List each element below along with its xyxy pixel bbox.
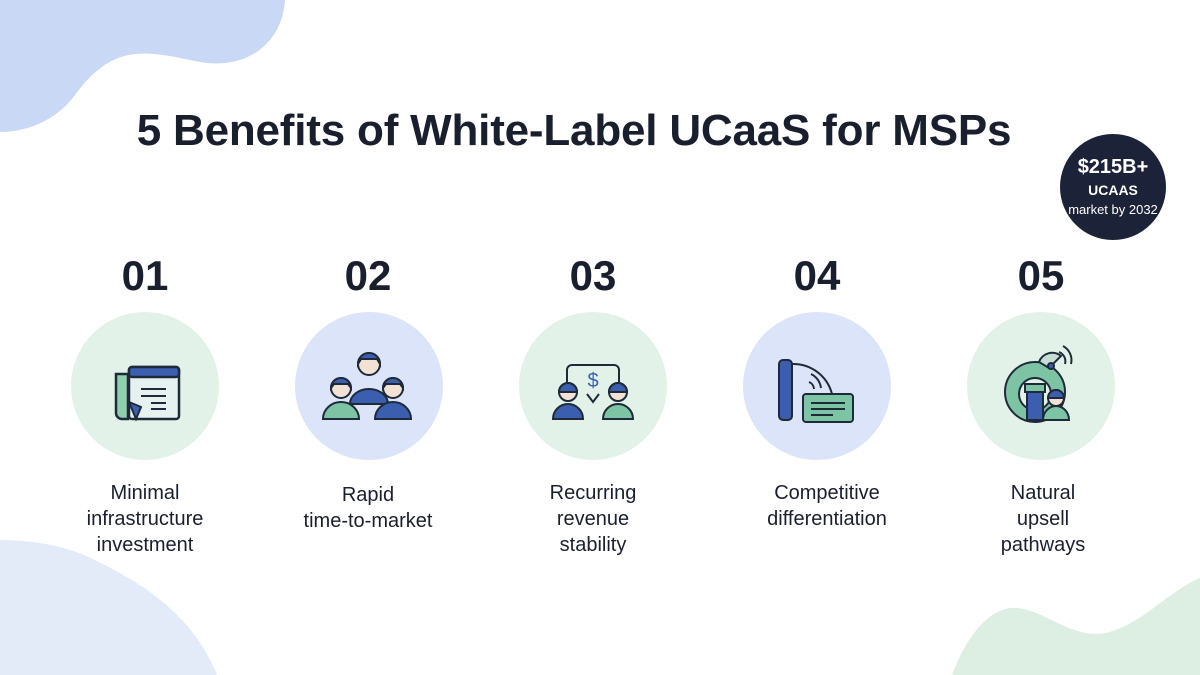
- label 3: stability: [560, 534, 626, 556]
- label 2: time-to-market: [304, 510, 432, 532]
- icon circle 1: document: [71, 312, 219, 460]
- label 4: differentiation: [767, 508, 887, 530]
- icon circle 5: upsell: [967, 312, 1115, 460]
- label 1: infrastructure: [87, 508, 203, 530]
- label 5: upsell: [1017, 508, 1069, 530]
- label 5: [1001, 482, 1085, 556]
- label 1: [87, 482, 203, 556]
- label 2: [304, 484, 432, 532]
- icon circle 2: team: [295, 312, 443, 460]
- badge: market stat: $215B+: [1078, 156, 1148, 178]
- icon circle 3: revenue: [519, 312, 667, 460]
- icon circle 3: revenue: $: [587, 370, 599, 392]
- number 02: 02: [345, 252, 391, 299]
- number 04: 04: [794, 252, 840, 299]
- label 1: investment: [97, 534, 193, 556]
- label 3: revenue: [557, 508, 629, 530]
- label 5: Natural: [1011, 482, 1075, 504]
- badge: market stat: market by 2032: [1068, 202, 1158, 217]
- label 5: pathways: [1001, 534, 1085, 556]
- badge: market stat: UCAAS: [1088, 182, 1138, 198]
- label 2: Rapid: [342, 484, 394, 506]
- label 3: [550, 482, 636, 556]
- number 03: 03: [570, 252, 616, 299]
- title: 5 Benefits of White-Label UCaaS for MSPs: [137, 106, 1011, 155]
- label 4: Competitive: [774, 482, 880, 504]
- label 3: Recurring: [550, 482, 636, 504]
- number 05: 05: [1018, 252, 1064, 299]
- label 1: Minimal: [111, 482, 179, 504]
- icon circle 4: phone: [743, 312, 891, 460]
- label 4: [767, 482, 887, 530]
- number 01: 01: [122, 252, 168, 299]
- badge: market stat: [1060, 134, 1166, 240]
